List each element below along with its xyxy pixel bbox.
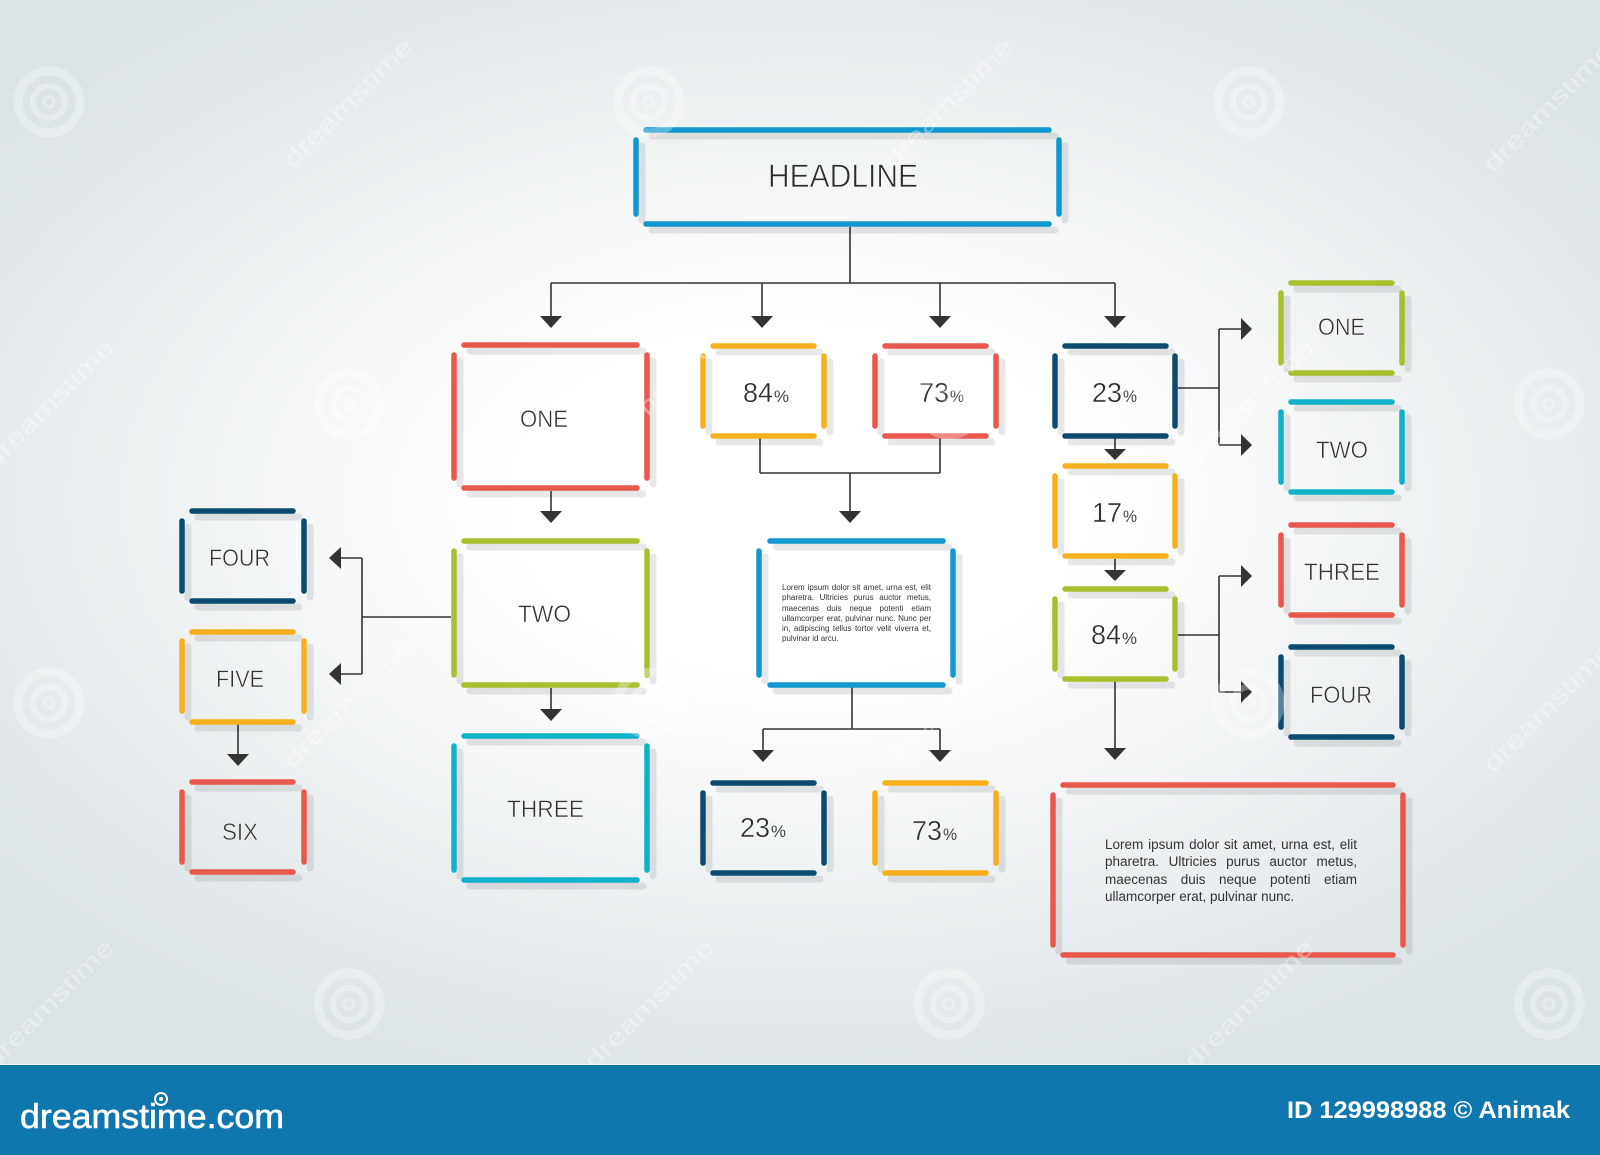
panel: central text box [759,541,959,691]
panel: left four: FOUR [209,545,270,572]
panel: 73 percent [875,346,1002,442]
panel: bottom text box [1053,785,1409,961]
watermark pattern: dreamstime [1179,334,1320,475]
panel: left five [182,632,310,728]
connector: percentages merge into text box [760,438,940,523]
panel: two: TWO [518,601,571,628]
panel: right column 17 percent [1055,466,1181,562]
panel: right column 23 percent: % [1123,387,1137,406]
arrow: 23 percent to 17 percent [1104,438,1126,460]
text block: central paragraph: ullamcorper erat, pulvinar nunc. Nunc per [782,614,931,623]
text block: bottom paragraph: Lorem ipsum dolor sit amet, urna est, elit [1105,837,1357,852]
panel: 73 percent: % [950,387,964,406]
panel: bottom 73 percent: % [943,825,957,844]
arrow: five to six [227,724,249,766]
watermark pattern: dreamstime [278,33,419,174]
footer logo: dreamstime.com [20,1098,284,1136]
panel: two [454,541,653,691]
panel: right column 84 percent [1055,589,1181,685]
panel: left six [182,782,310,878]
panel: bottom 73 percent: 73 [912,815,942,846]
connector: 23 percent to right one and two [1178,318,1252,456]
panel: right three: THREE [1304,559,1380,586]
arrow: 84 percent to text box [1104,681,1126,760]
panel: one: ONE [520,406,568,433]
connector: headline to four columns [540,227,1126,328]
panel: bottom 23 percent: % [771,822,786,841]
connector: two to four and five [329,547,451,685]
panel: right column 17 percent: 17 [1092,497,1122,528]
heading: headline: HEADLINE [768,158,918,194]
text block: central paragraph: pharetra. Ultricies purus auctor metus, [782,593,931,602]
panel: 73 percent: 73 [919,377,949,408]
text block: bottom paragraph [1105,837,1357,904]
panel: three: THREE [507,796,584,823]
panel: three [454,736,653,886]
panel: one [454,345,653,494]
arrow: 17 percent to 84 percent [1104,559,1126,581]
connector: text box to bottom percentages [752,687,951,762]
footer image id: ID 129998988 © Animak [1287,1097,1571,1124]
watermark pattern: dreamstime [1478,37,1600,178]
text block: central paragraph: pulvinar id arcu. [782,634,838,643]
footer band [0,1064,1600,1155]
panel: right column 84 percent: 84 [1091,619,1121,650]
watermark pattern: dreamstime [1478,637,1600,778]
panel: 84 percent [703,346,830,442]
panel: 84 percent: % [774,387,789,406]
panel: bottom 73 percent [875,783,1002,879]
panel: bottom 23 percent: 23 [740,812,770,843]
text block: bottom paragraph: pharetra. Ultricies purus auctor metus, [1105,854,1357,869]
panel: right column 23 percent [1055,346,1181,442]
panel: right column 23 percent: 23 [1092,377,1122,408]
panel: right column 17 percent: % [1123,507,1137,526]
text block: bottom paragraph: ullamcorper erat, pulvinar nunc. [1105,889,1294,904]
panel: bottom 23 percent [703,783,830,879]
watermark pattern: dreamstime [878,33,1019,174]
watermark pattern: dreamstime [878,633,1019,774]
panel: right one: ONE [1318,314,1365,341]
watermark pattern: dreamstime [579,934,720,1075]
panel: left five: FIVE [216,666,264,693]
panel: right four [1281,647,1408,743]
text block: central paragraph: maecenas duis neque potenti etiam [782,604,931,613]
text block: central paragraph: in, adipiscing tellus tortor velit viverra et, [782,624,931,633]
text block: central paragraph [782,583,931,643]
panel: left six: SIX [222,819,258,846]
panel: right column 84 percent: % [1122,629,1137,648]
panel: left four [182,511,310,607]
panel: right two [1281,402,1408,498]
watermark pattern: dreamstime [278,633,419,774]
text block: central paragraph: Lorem ipsum dolor sit amet, urna est, elit [782,583,931,592]
panel: right one [1281,283,1408,379]
watermark pattern: dreamstime [579,334,720,475]
arrow: one to two [540,491,562,523]
connector: 84 percent to right three and four [1178,565,1252,703]
panel: right three [1281,525,1408,621]
panel: 84 percent: 84 [743,377,773,408]
panel: right four: FOUR [1310,682,1372,709]
arrow: two to three [540,688,562,721]
panel: headline [636,130,1065,230]
panel: right two: TWO [1316,437,1368,464]
text block: bottom paragraph: maecenas duis neque potenti etiam [1105,872,1357,887]
watermark pattern: dreamstime [1179,934,1320,1075]
